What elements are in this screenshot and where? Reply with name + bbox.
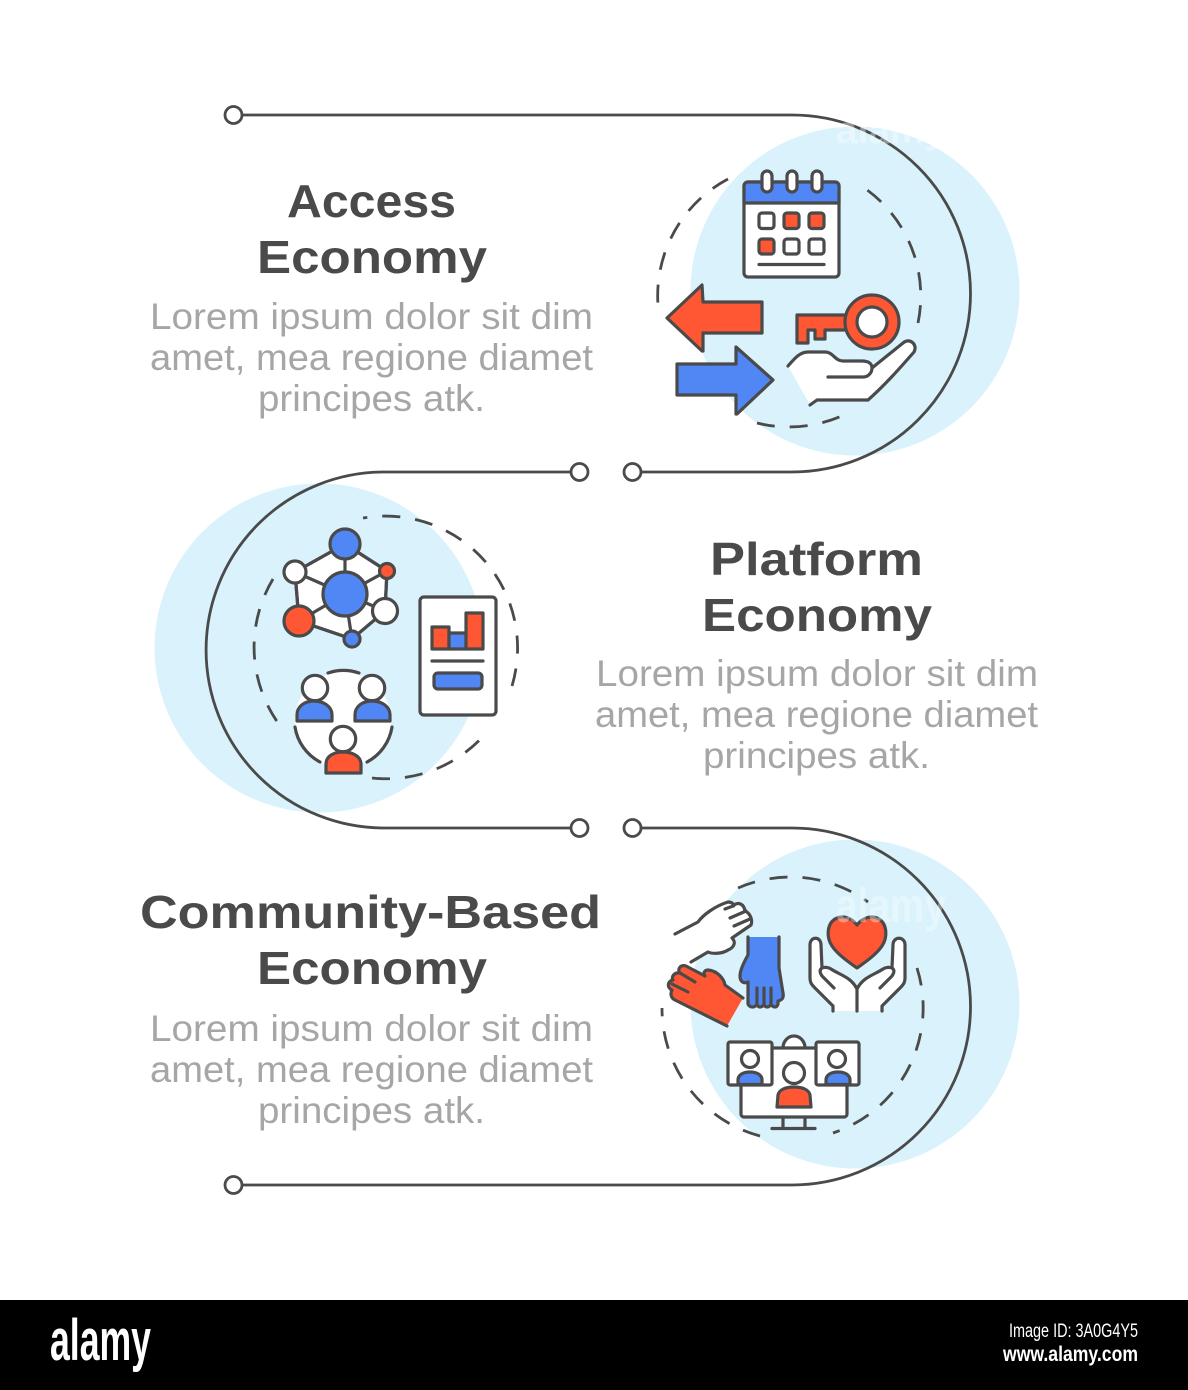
text block: Community-Based Economy description [150,1008,594,1131]
text block: Platform Economy description: Lorem ipsum dolor sit dim [596,653,1038,694]
text block: Platform Economy description: amet, mea regione diamet [595,694,1039,735]
text block: Access Economy description: amet, mea regione diamet [150,337,594,378]
text block: Platform Economy description [595,653,1039,776]
background circle: platform [154,484,484,812]
icon: red arrow left [667,285,762,351]
dashed ring: access [658,179,921,427]
text block: Access Economy description [150,296,594,419]
connector line: community section [225,820,971,1194]
icon: blue arrow right [677,347,773,414]
heading: Access Economy: Economy [257,231,487,283]
footer image id: Image ID: 3A0G4Y5 [1009,1321,1138,1342]
connector line: access section [225,106,971,480]
dashed ring: community [662,877,923,1136]
icon: red hand [668,966,743,1026]
heading: Community-Based Economy: Economy [257,942,487,994]
icon: blue hand [740,937,783,1007]
heading: Community-Based Economy: Community-Based [140,886,601,938]
text block: Community-Based Economy description: principes atk. [258,1090,485,1131]
dashed ring: platform [254,516,518,779]
heading: Platform Economy: Platform [710,533,923,585]
icon: people group [295,670,392,773]
heading: Access Economy: Access [287,175,456,227]
watermark: lower: alamy [836,880,946,933]
heading: Platform Economy [702,533,932,641]
text block: Access Economy description: Lorem ipsum dolor sit dim [150,296,593,337]
icon: calendar [744,171,839,277]
background circle: community [690,840,1020,1168]
heading: Platform Economy: Economy [702,589,932,641]
background circle: access [690,126,1020,456]
connector line: platform section [206,464,588,836]
text block: Community-Based Economy description: amet, mea regione diamet [150,1049,594,1090]
icon: open hand [788,341,915,405]
heading: Access Economy [257,175,487,283]
text block: Access Economy description: principes atk. [258,378,485,419]
icon: report document with bar chart [420,597,496,715]
heading: Community-Based Economy [140,886,601,994]
footer bar [0,1300,1188,1390]
icon: white hand [675,902,752,962]
icon: video conference monitor [728,1036,859,1128]
icon: network diagram [284,529,398,647]
text block: Community-Based Economy description: Lorem ipsum dolor sit dim [150,1008,593,1049]
text block: Platform Economy description: principes atk. [703,735,930,776]
footer logo: alamy [50,1308,151,1373]
icon: key [797,295,899,349]
icon: hands holding heart [810,917,905,1011]
footer url: www.alamy.com [1002,1343,1138,1366]
watermark: upper: alamy [836,110,946,152]
